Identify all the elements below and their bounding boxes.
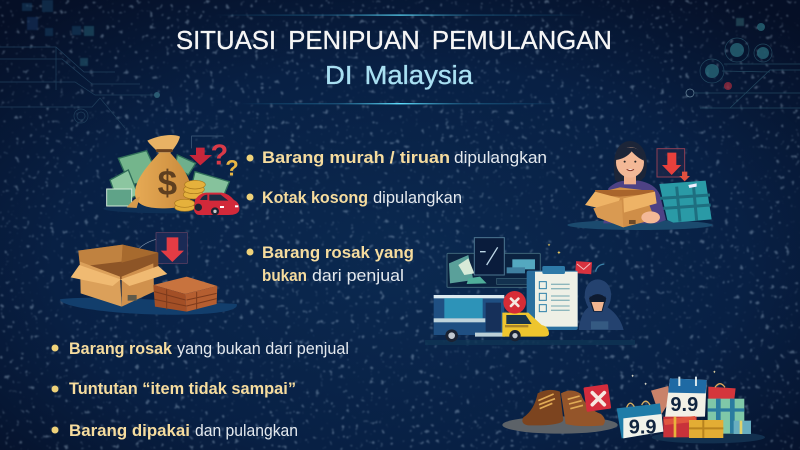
bullet: barang murah: dipulangkan bbox=[454, 149, 547, 167]
icon: truck, checklist and hacker: ✦ bbox=[547, 243, 551, 248]
top glow line bbox=[215, 14, 585, 16]
circuit nodes right bbox=[686, 23, 800, 108]
bullet: barang rosak bukan bbox=[52, 340, 349, 358]
icon: woman with box and gift bbox=[567, 141, 713, 230]
icon: open box with bricks bbox=[60, 233, 237, 315]
icon: money bag with car and question marks: $ bbox=[158, 164, 177, 203]
bullet: barang murah bbox=[246, 149, 547, 167]
circuit lines left bbox=[0, 47, 160, 128]
icon: money bag with car and question marks: ? bbox=[225, 155, 239, 180]
bullet: barang murah: Barang murah / tiruan bbox=[262, 149, 450, 167]
title: SITUASI PENIPUAN PEMULANGAN bbox=[176, 27, 612, 55]
bullet: barang dipakai bbox=[52, 422, 298, 440]
bullet: kotak kosong: dipulangkan bbox=[373, 189, 462, 207]
bullet: kotak kosong bbox=[246, 189, 462, 207]
icon: money bag with car and question marks bbox=[103, 135, 240, 215]
icon: shoes and 9.9 sale gifts: ✦ bbox=[712, 369, 716, 374]
icon: shoes and 9.9 sale gifts bbox=[502, 369, 765, 443]
bullet: barang dipakai: dan pulangkan bbox=[195, 422, 298, 440]
bullet: barang dipakai: Barang dipakai bbox=[69, 422, 190, 440]
icon: money bag with car and question marks: ? bbox=[211, 139, 228, 171]
subtitle: DI Malaysia bbox=[325, 62, 474, 90]
bullet: barang rosak: dari penjual bbox=[312, 267, 404, 285]
icon: shoes and 9.9 sale gifts: 9.9 bbox=[629, 416, 657, 438]
bullet: barang rosak bukan: yang bukan dari penjual bbox=[177, 340, 349, 358]
bullet: kotak kosong: Kotak kosong bbox=[262, 189, 368, 207]
bottom glow line bbox=[240, 103, 560, 104]
bullet: tuntutan: Tuntutan “item tidak sampai” bbox=[69, 380, 296, 398]
bullet list bottom bbox=[52, 340, 349, 440]
bullet: barang rosak bbox=[246, 244, 414, 285]
icon: truck, checklist and hacker bbox=[425, 238, 635, 345]
icon: truck, checklist and hacker: ✦ bbox=[557, 250, 562, 257]
bullet list top bbox=[246, 149, 547, 285]
icon: shoes and 9.9 sale gifts: ✦ bbox=[631, 373, 635, 378]
icon: shoes and 9.9 sale gifts: 9.9 bbox=[670, 394, 698, 416]
bullet: barang rosak: Barang rosak yang bbox=[262, 244, 414, 262]
bullet: barang rosak: bukan bbox=[262, 267, 307, 285]
bullet: barang rosak bukan: Barang rosak bbox=[69, 340, 173, 358]
icon: shoes and 9.9 sale gifts: ✦ bbox=[644, 381, 648, 386]
